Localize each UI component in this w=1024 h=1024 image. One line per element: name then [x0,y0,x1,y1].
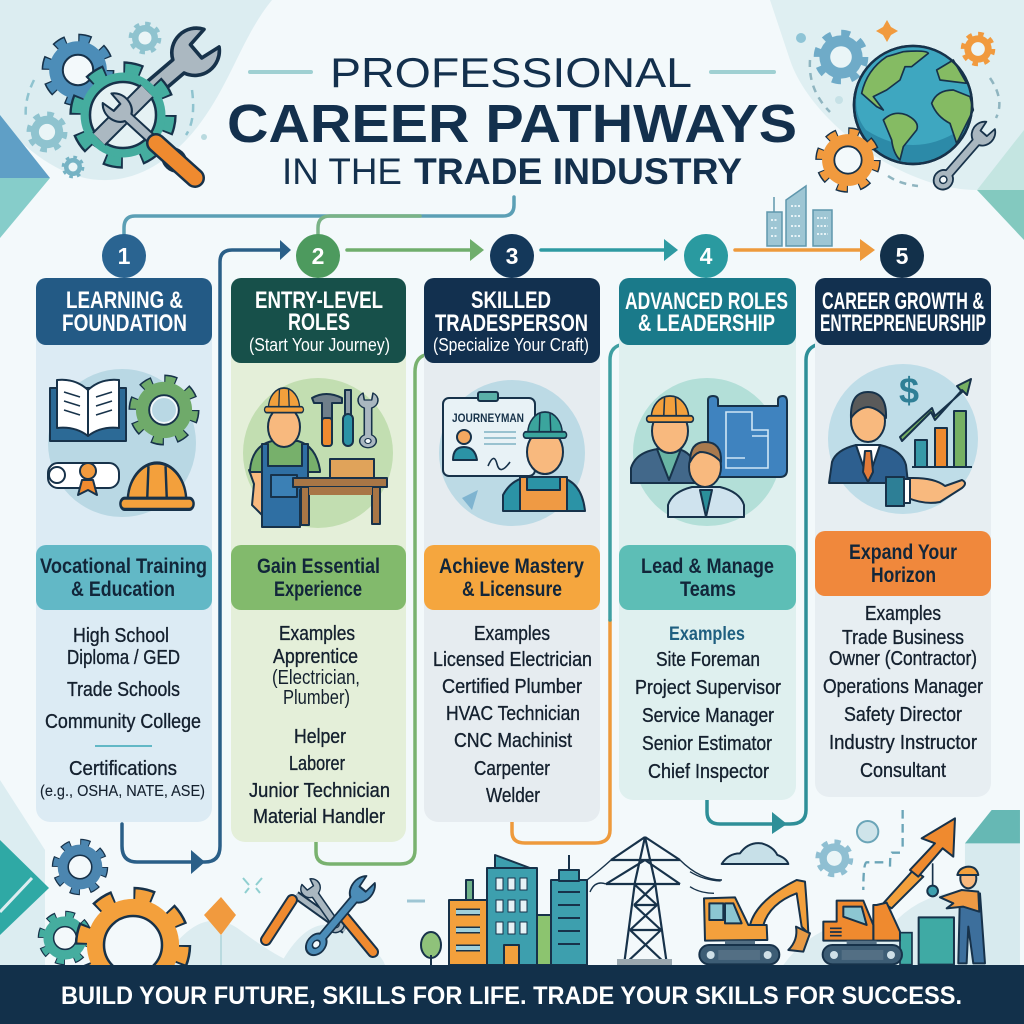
list: leadership examples: Examples [669,624,745,645]
list: foundation examples: (e.g., OSHA, NATE, ASE) [40,783,205,800]
list: leadership examples: Site Foreman [656,648,760,671]
illustration: cloud [722,843,788,864]
sub-banner: expand your horizon [815,531,991,596]
connector: step 4 to step 5 [735,239,875,261]
list: entry-level examples: Examples [279,622,355,645]
sub-banner: achieve mastery [424,545,600,610]
sub-banner: gain essential experience: Experience [274,578,362,601]
title [227,49,797,192]
list: entry-level examples: Junior Technician [249,779,390,802]
list: entry-level examples: Helper [294,725,346,748]
icon group: journeyman badge and worker [439,380,585,526]
list: skilled examples: Welder [486,784,540,807]
connector: start to step 2 [318,216,420,234]
corner shape: left triangles [0,115,50,238]
icon group: book, gear, diploma, helmet [48,369,196,517]
list: entry-level examples [249,622,390,828]
illustration: backdrop lower right [783,810,1020,965]
sub-banner: gain essential experience [231,545,406,610]
title: PROFESSIONAL [330,49,692,96]
illustration: excavator [690,872,810,964]
title: IN THE [282,151,402,192]
list: growth examples: Consultant [860,759,946,782]
header: learning and foundation: FOUNDATION [62,310,187,337]
illustration: crane with growth arrow [818,810,985,965]
icon group: worker with tools [243,378,393,528]
list: foundation examples: Community College [45,710,201,733]
list: growth examples: Operations Manager [823,675,983,698]
connector: column 3 to column 4 [512,620,610,843]
corner shape: top right [770,0,1024,190]
corner shape: right triangles [977,130,1024,240]
connector: step 3 to step 4 [541,239,678,261]
header: entry-level roles: ENTRY-LEVEL [255,287,383,314]
list: skilled examples: Carpenter [474,757,550,780]
step number badges: 1 [118,243,131,269]
header: skilled tradesperson: SKILLED [471,287,551,314]
footer banner [0,965,1024,1024]
sub-banner: vocational training [36,545,212,610]
header: advanced roles: ADVANCED ROLES [625,288,788,315]
icon group: supervisors and blueprint [631,378,787,526]
sub-banner: lead and manage: Teams [680,578,736,601]
dollar sign: $ [899,370,919,411]
list: leadership examples: Chief Inspector [648,760,769,783]
connector: column 4 upper [610,345,620,620]
header: learning and foundation [36,278,212,345]
sub-banner: achieve mastery: Achieve Mastery [439,555,584,578]
list: growth examples: Safety Director [844,703,962,726]
list: foundation examples: Trade Schools [67,678,180,701]
list: foundation examples [40,624,205,800]
list: growth examples: Owner (Contractor) [829,647,977,670]
label: journeyman: JOURNEYMAN [452,411,524,425]
illustration: city skyline [407,855,587,965]
list: growth examples: Examples [865,602,941,625]
panel: learning and foundation [36,278,212,822]
list: skilled examples: HVAC Technician [446,702,580,725]
footer banner: BUILD YOUR FUTURE, SKILLS FOR LIFE. TRADE YOUR SKILLS FOR SUCCESS. [61,982,962,1010]
list: growth examples: Industry Instructor [829,731,977,754]
connector: column 2 to column 3 [316,355,425,864]
list: foundation examples: Certifications [69,757,177,780]
list: entry-level examples: Plumber) [283,686,350,709]
connector: step 1 to step 2 [122,240,291,874]
list: skilled examples: CNC Machinist [454,729,572,752]
connector: column 4 to column 5 [707,345,816,834]
sub-banner: achieve mastery: & Licensure [462,578,562,601]
header: advanced roles [619,278,796,345]
icon: globe, gears and wrench top right [796,20,999,195]
header: skilled tradesperson: (Specialize Your Craft) [433,335,589,355]
list: skilled examples [433,622,592,807]
header: entry-level roles: ROLES [288,309,350,336]
corner shape: top left [0,0,272,180]
list: entry-level examples: Apprentice [273,645,358,668]
list: leadership examples: Service Manager [642,704,774,727]
header: career growth [815,278,991,345]
illustration: crossed tools [266,873,385,965]
list: growth examples: Trade Business [842,626,964,649]
header: skilled tradesperson [424,278,600,363]
illustration: transmission tower [587,837,722,965]
icon group: business owner with growth chart [828,364,978,514]
sub-banner: expand your horizon: Horizon [871,564,936,587]
header: advanced roles: & LEADERSHIP [638,310,775,337]
sub-banner: vocational training: & Education [71,578,175,601]
step number badges: 2 [312,243,324,269]
icon: gears and wrench top left [26,20,227,178]
header: entry-level roles: (Start Your Journey) [249,335,390,355]
header: skilled tradesperson: TRADESPERSON [435,310,588,337]
list: entry-level examples: Material Handler [253,805,385,828]
title: CAREER PATHWAYS [227,94,797,154]
panel: career growth and entrepreneurship [815,278,991,797]
sub-banner: vocational training: Vocational Training [40,555,207,578]
step number badges: 5 [896,243,909,269]
sub-banner: expand your horizon: Expand Your [849,541,957,564]
step number badges: 3 [506,243,518,269]
sub-banner: lead and manage [619,545,796,610]
list: leadership examples [635,624,781,783]
sub-banner: lead and manage: Lead & Manage [641,555,774,578]
list: entry-level examples: Laborer [289,752,345,775]
sub-banner: gain essential experience: Gain Essential [257,555,380,578]
title: TRADE INDUSTRY [414,151,742,192]
list: entry-level examples: (Electrician, [272,666,360,689]
step number badges [102,234,924,278]
connector: step 2 to step 3 [347,239,484,261]
panel: advanced roles and leadership [619,278,796,800]
list: skilled examples: Examples [474,622,550,645]
corner shape: bottom left [0,780,49,965]
list: skilled examples: Licensed Electrician [433,648,592,671]
list: leadership examples: Project Supervisor [635,676,781,699]
illustration: bottom-left gears [42,843,300,994]
list: leadership examples: Senior Estimator [642,732,772,755]
list: foundation examples: High School [73,624,169,647]
panel: entry-level roles [231,278,406,842]
list: skilled examples: Certified Plumber [442,675,582,698]
icon: skyline top [767,186,832,246]
header: learning and foundation: LEARNING & [66,287,183,314]
list: growth examples [823,602,983,782]
list: foundation examples: Diploma / GED [67,646,180,669]
step number badges: 4 [700,243,713,269]
connector: start to step 1 [124,197,514,234]
panel: skilled tradesperson [424,278,600,822]
header: entry-level roles [231,278,406,363]
